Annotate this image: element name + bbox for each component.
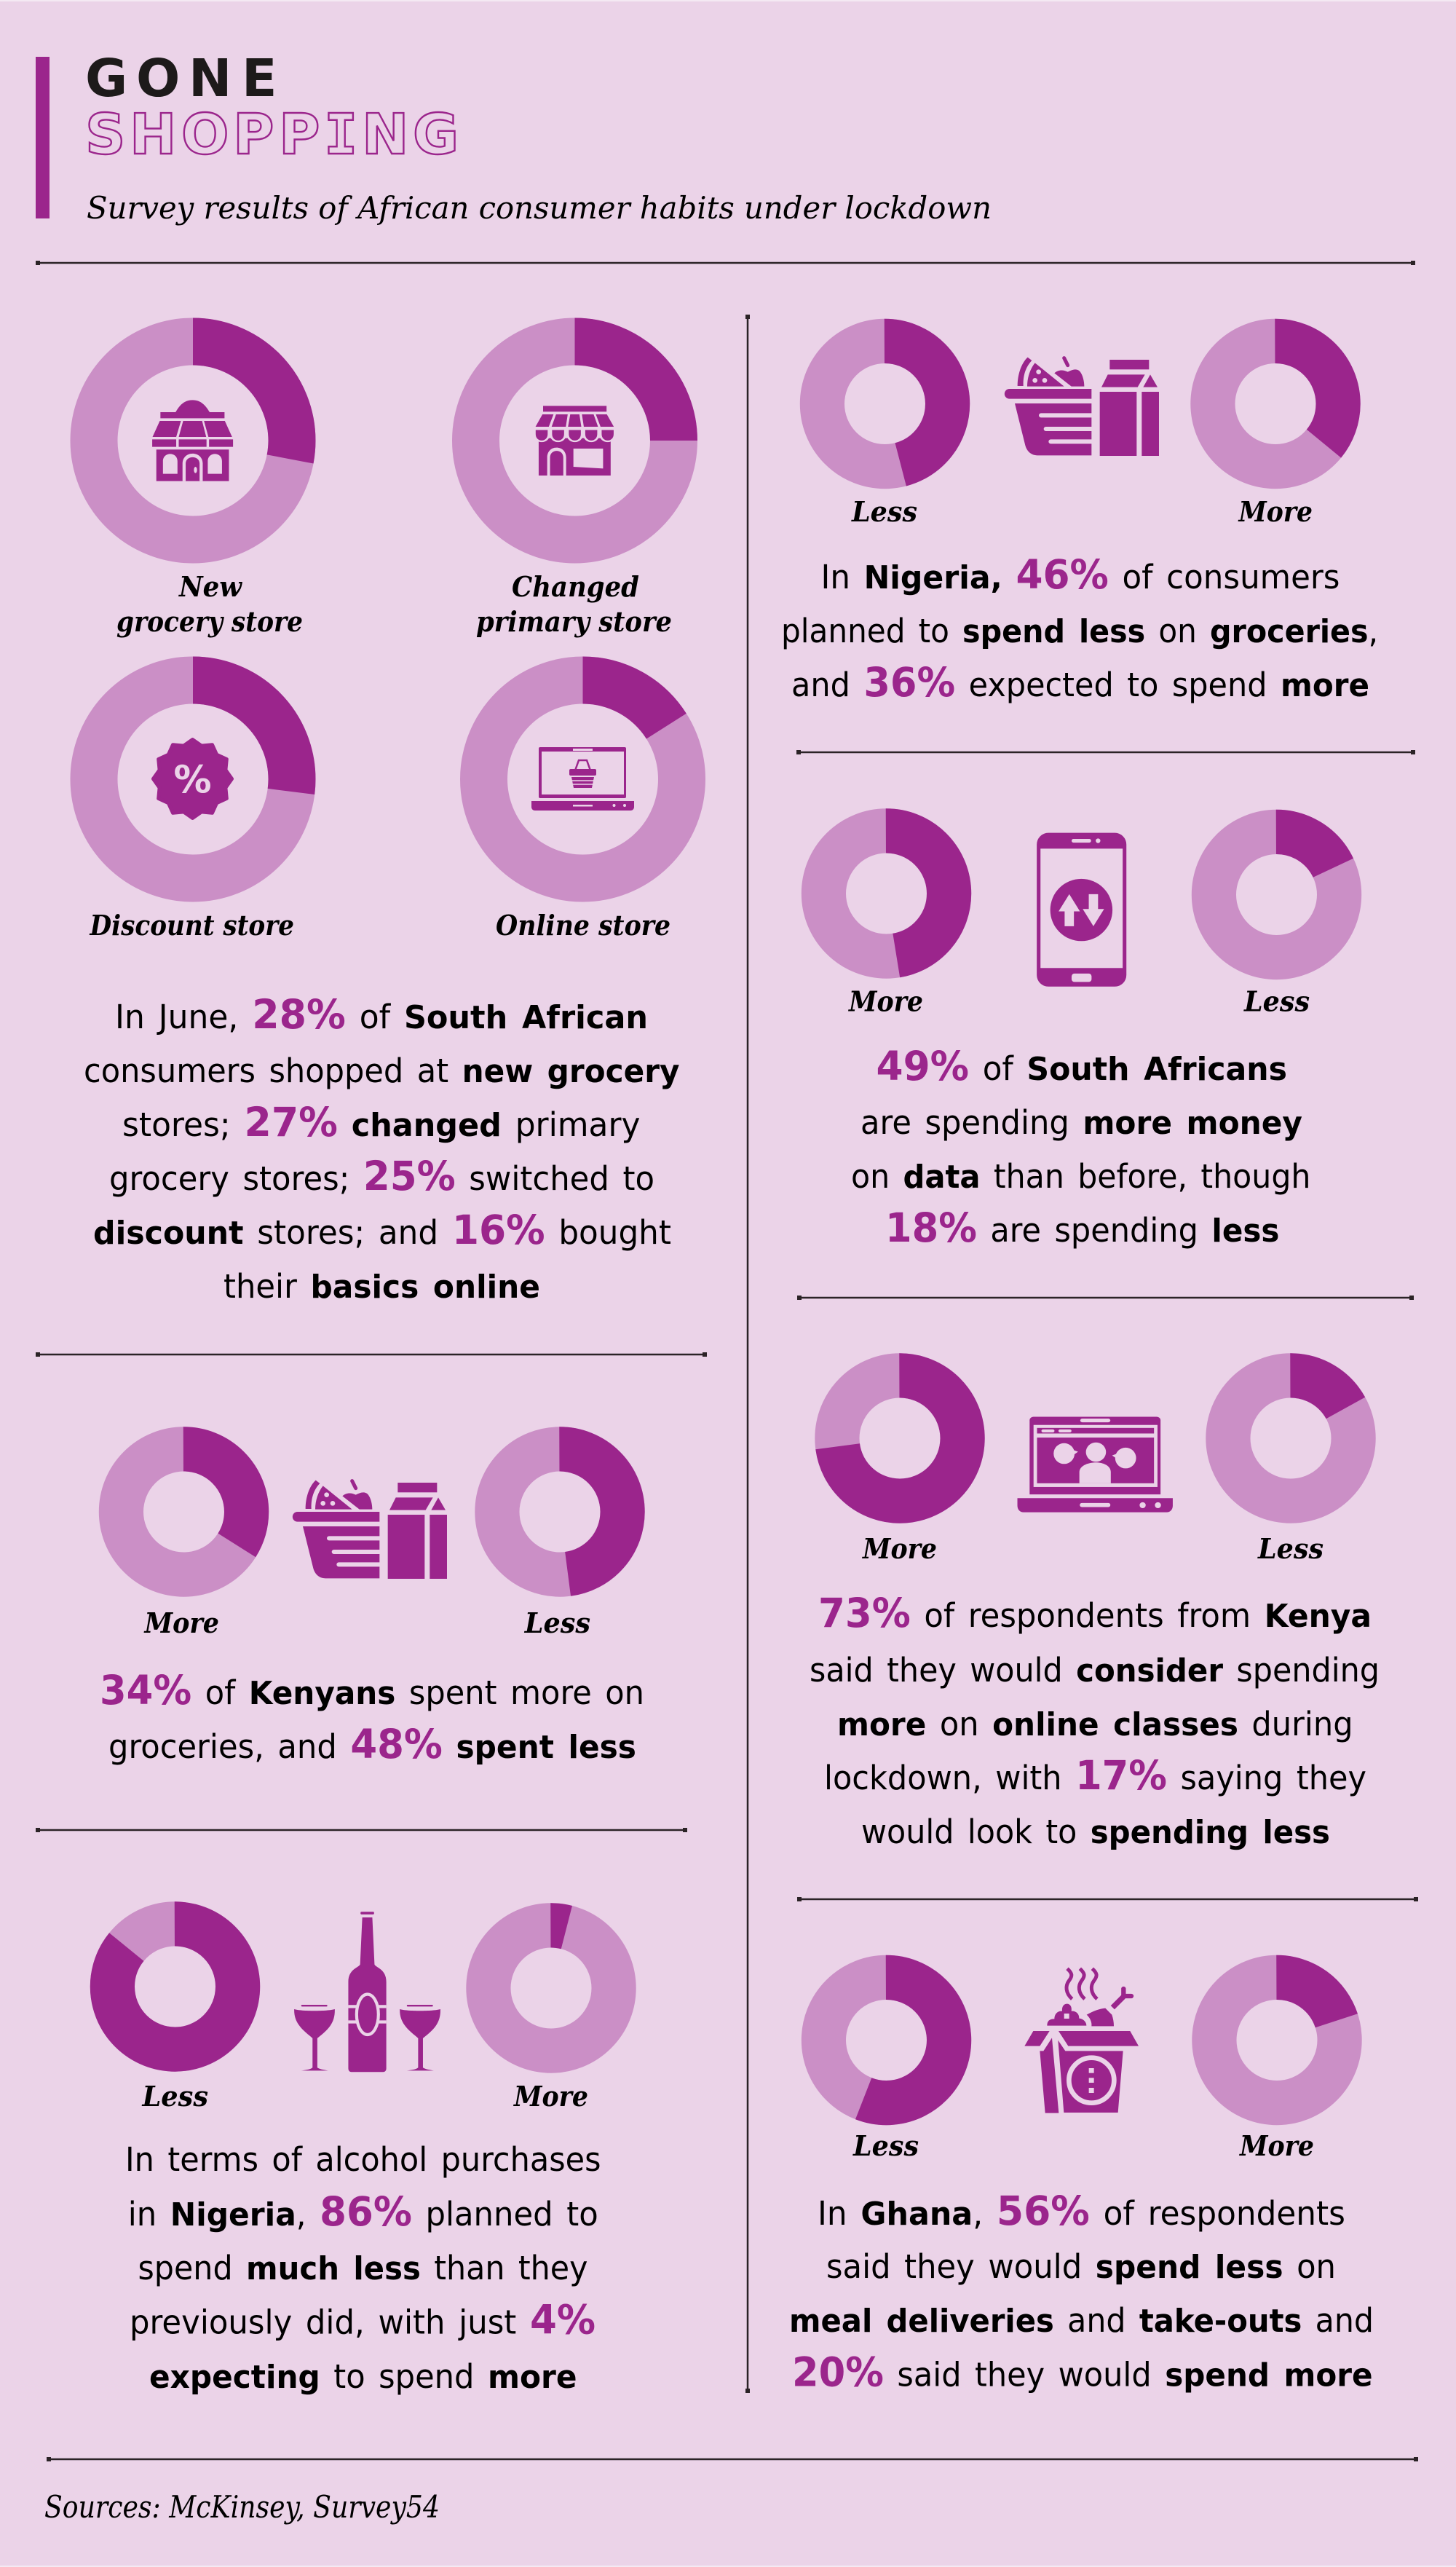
text: South Africa stores: discount stores; and 16% bought [93, 1207, 671, 1253]
label: less: Less [524, 1606, 590, 1639]
text: Kenya online classes: 73% of respondents from Kenya [818, 1590, 1372, 1636]
label: new grocery store [116, 570, 303, 638]
text: South Africa data [851, 1043, 1310, 1251]
label: less: Less [1243, 985, 1310, 1018]
text: Ghana meal deliveries: In Ghana, 56% of respondents [818, 2188, 1345, 2234]
panel: South Africa store switching [84, 342, 681, 1306]
icon: discount badge [153, 740, 232, 819]
donut: discount store 27% [94, 680, 292, 878]
icon: discount badge: % [173, 759, 212, 803]
donut: more 73% [837, 1376, 962, 1501]
text: South Africa stores: stores; 27% changed primary [122, 1099, 641, 1146]
donut: less 48% [497, 1449, 622, 1574]
label: less: Less [1257, 1532, 1324, 1565]
icon: take-out box with steam [1024, 1968, 1139, 2113]
text: Kenya online classes: lockdown, with 17% saying they [824, 1752, 1366, 1799]
donut: less 18% [1214, 832, 1340, 958]
text: Nigeria alcohol [125, 2140, 601, 2396]
text: South Africa data: on data than before, though [851, 1157, 1310, 1196]
panel: Ghana meal deliveries [789, 1968, 1374, 2396]
text: Nigeria alcohol: expecting to spend more [149, 2357, 577, 2396]
text: Kenya online classes: said they would consider spending [810, 1651, 1380, 1689]
text: Nigeria alcohol: previously did, with just 4% [130, 2297, 596, 2343]
label: online store: Online store [496, 909, 670, 942]
panel: South Africa data [823, 831, 1340, 1251]
title: SHOPPING: SHOPP [85, 103, 320, 167]
label: more: More [513, 2080, 588, 2113]
donut: more 4% [488, 1925, 614, 2051]
icon: laptop video class [1018, 1417, 1173, 1513]
label: more: More [847, 985, 923, 1018]
sources: Sources: McKinsey, Survey54 [44, 2489, 440, 2525]
icon: storefront with awning [534, 406, 614, 476]
text: Kenya groceries [100, 1667, 644, 1767]
text: Kenya online classes [810, 1590, 1380, 1851]
icon: grocery basket and milk carton [1005, 358, 1159, 456]
donut: more 20% [1214, 1977, 1340, 2103]
donut: new grocery store 28% [94, 342, 292, 540]
panel: Kenya online classes [810, 1376, 1380, 1851]
panel: Nigeria groceries [781, 341, 1378, 706]
text: Nigeria alcohol: spend much less than they [138, 2249, 588, 2287]
text: Kenya online classes: more on online classes during [837, 1705, 1353, 1743]
donut: more 49% [823, 831, 949, 956]
donut: less 56% [823, 1977, 949, 2103]
label: more: More [1238, 2129, 1314, 2162]
text: Nigeria alcohol: In terms of alcohol purchases [125, 2140, 601, 2179]
text: South Africa data: 18% are spending less [885, 1204, 1280, 1251]
label: new grocery store: grocery store [116, 605, 303, 638]
text: Nigeria groceries: planned to spend less on groceries, [781, 612, 1378, 650]
icon: laptop with basket [531, 747, 634, 811]
text: Kenya online classes: would look to spending less [861, 1813, 1330, 1851]
text: Ghana meal deliveries: 20% said they would spend more [792, 2349, 1373, 2396]
donut: more 34% [121, 1449, 247, 1574]
icon: grocery store building [152, 400, 233, 481]
donut: less 17% [1228, 1376, 1353, 1501]
label: changed primary store [476, 570, 672, 638]
icon: grocery basket and milk carton [293, 1480, 447, 1579]
text: Ghana meal deliveries: meal deliveries and take-outs and [789, 2301, 1374, 2340]
icon: wine bottle and glasses [294, 1912, 440, 2072]
label: new grocery store: New [178, 570, 242, 603]
text: Nigeria groceries [781, 551, 1378, 706]
label: more: More [1238, 495, 1313, 528]
label: less: Less [851, 495, 917, 528]
text: Ghana meal deliveries [789, 2188, 1374, 2396]
donut: less 86% [112, 1924, 238, 2049]
text: Kenya groceries: 34% of Kenyans spent more on [100, 1667, 644, 1714]
donut: changed primary store 25% [476, 342, 674, 540]
text: Ghana meal deliveries: said they would spend less on [826, 2247, 1336, 2286]
label: more: More [861, 1532, 937, 1565]
panel: Nigeria alcohol [112, 1912, 614, 2396]
text: South Africa stores: their basics online [223, 1267, 540, 1306]
text: South Africa stores: grocery stores; 25% switched to [109, 1153, 654, 1199]
panel: Kenya groceries [100, 1449, 644, 1767]
text: South Africa data: are spending more money [860, 1103, 1302, 1142]
title: SHOPPING: I [324, 103, 357, 167]
label: changed primary store: primary store [476, 605, 672, 638]
text: Nigeria alcohol: in Nigeria, 86% planned to [128, 2188, 598, 2235]
accent bar [36, 57, 50, 218]
label: more: More [143, 1606, 219, 1639]
text: South Africa stores: consumers shopped at new grocery [84, 1052, 680, 1090]
donut: online store 16% [483, 680, 681, 878]
text: Kenya groceries: groceries, and 48% spent less [108, 1721, 636, 1767]
subtitle: Survey results of African consumer habits under lockdown [87, 190, 992, 226]
label: changed primary store: Changed [512, 570, 639, 603]
text: South Africa stores [84, 991, 680, 1306]
header [36, 48, 992, 226]
icon: smartphone with data arrows [1037, 833, 1126, 987]
label: discount store: Discount store [90, 909, 294, 942]
label: less: Less [142, 2080, 208, 2113]
text: South Africa stores: In June, 28% of South African [115, 991, 648, 1038]
text: Nigeria groceries: and 36% expected to spend more [791, 659, 1369, 706]
text: South Africa data: 49% of South Africans [877, 1043, 1287, 1089]
title: SHOPPING: NG [362, 103, 459, 167]
text: Nigeria groceries: In Nigeria, 46% of consumers [821, 551, 1340, 598]
title: GONE: GONE [85, 48, 277, 109]
label: less: Less [852, 2129, 919, 2162]
donut: less 46% [822, 341, 948, 467]
donut: more 36% [1213, 341, 1338, 467]
